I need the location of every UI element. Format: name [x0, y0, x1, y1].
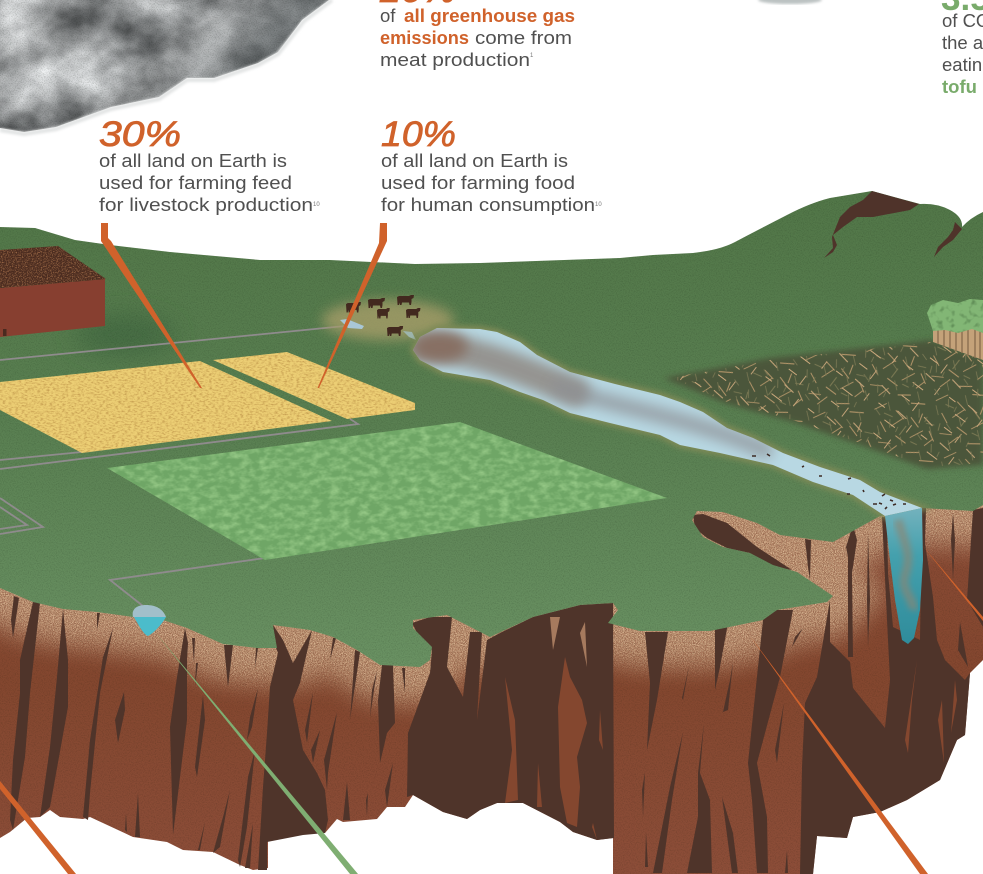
line 2: used for farming feed: [99, 172, 292, 193]
cloud: [0, 0, 340, 140]
footnote: 10: [313, 202, 320, 208]
callout line: orange bottom left: [0, 781, 76, 874]
footnote: 10: [595, 202, 602, 208]
cliff dark crevices: [10, 508, 983, 874]
cliff rock base: [0, 490, 983, 874]
hill gully right: [934, 222, 962, 257]
line 4: tofu: [942, 76, 977, 97]
cattle herd: [346, 295, 420, 336]
green crop field: [107, 422, 667, 560]
figure: 30%: [99, 115, 181, 154]
callout line: green pond: [155, 632, 358, 874]
hill gully left: [824, 191, 919, 258]
irrigation pipes: [0, 326, 358, 606]
stat: greenhouse gas: [379, 0, 575, 70]
stat: 10% land: [381, 115, 602, 215]
stat text line 3: meat production: [380, 49, 530, 70]
line 1: of all land on Earth is: [381, 150, 568, 171]
stat: tofu CO2: [941, 0, 983, 97]
falling water: [885, 508, 923, 644]
line 3: eatin: [942, 54, 982, 75]
grass: [0, 191, 983, 667]
line 1: of all land on Earth is: [99, 150, 287, 171]
land surface: [0, 180, 983, 680]
line 3: for human consumption: [381, 194, 595, 215]
callout line: orange waterfall: [922, 545, 983, 621]
cliff-edge water pond: [133, 605, 166, 636]
stat text bold: all greenhouse gas: [404, 5, 575, 26]
figure: 10%: [381, 115, 456, 154]
callout line: orange cliff: [750, 636, 928, 874]
cliff sunlit rock band: [0, 505, 983, 874]
line 2: used for farming food: [381, 172, 575, 193]
manure-stained ground around cattle: [322, 300, 454, 340]
tree trunks: [933, 325, 983, 360]
line 3: for livestock production: [99, 194, 313, 215]
stat: 30% land: [99, 115, 320, 215]
barn: [0, 244, 108, 337]
river bank halo: [413, 328, 922, 516]
cloud soft edge: [0, 0, 332, 134]
cleared forest with felled logs: [664, 340, 983, 469]
waterfall: [885, 508, 923, 644]
pond upper shell: [133, 605, 166, 617]
stat text line 1: of: [380, 5, 396, 26]
stat text line 2: come from: [475, 27, 572, 48]
small distant cloud: [758, 0, 822, 4]
stat text line 2 bold: emissions: [380, 27, 469, 48]
logs: [668, 342, 983, 467]
floating island cliff: [0, 505, 983, 874]
logs shaded: [672, 342, 983, 467]
line 2: the a: [942, 32, 983, 53]
manure plume in river: [412, 332, 765, 450]
cloud body: [0, 0, 340, 140]
yellow feed crop field: [0, 361, 332, 453]
logs crossing: [672, 342, 983, 467]
tree canopy: [927, 299, 983, 333]
runoff outlet: [403, 331, 416, 340]
barn wall: [0, 279, 105, 337]
cleared ground: [664, 340, 983, 469]
yellow food crop field: [213, 352, 415, 419]
callout line: 10% land: [318, 223, 387, 388]
footnote: 1: [530, 53, 534, 59]
callout line: 30% land: [101, 223, 202, 388]
remaining forest: [927, 299, 983, 360]
barn door: [3, 329, 6, 336]
cliff brown slivers in shadow: [505, 617, 957, 840]
barn shadow on grass: [82, 315, 168, 356]
polluted streak in waterfall: [898, 520, 913, 610]
polluted river: [412, 328, 922, 516]
water trough: [340, 319, 364, 329]
river water: [413, 328, 922, 516]
pond cyan water: [134, 617, 166, 636]
dead fish in river: [752, 454, 906, 509]
barn roof: [0, 246, 106, 288]
